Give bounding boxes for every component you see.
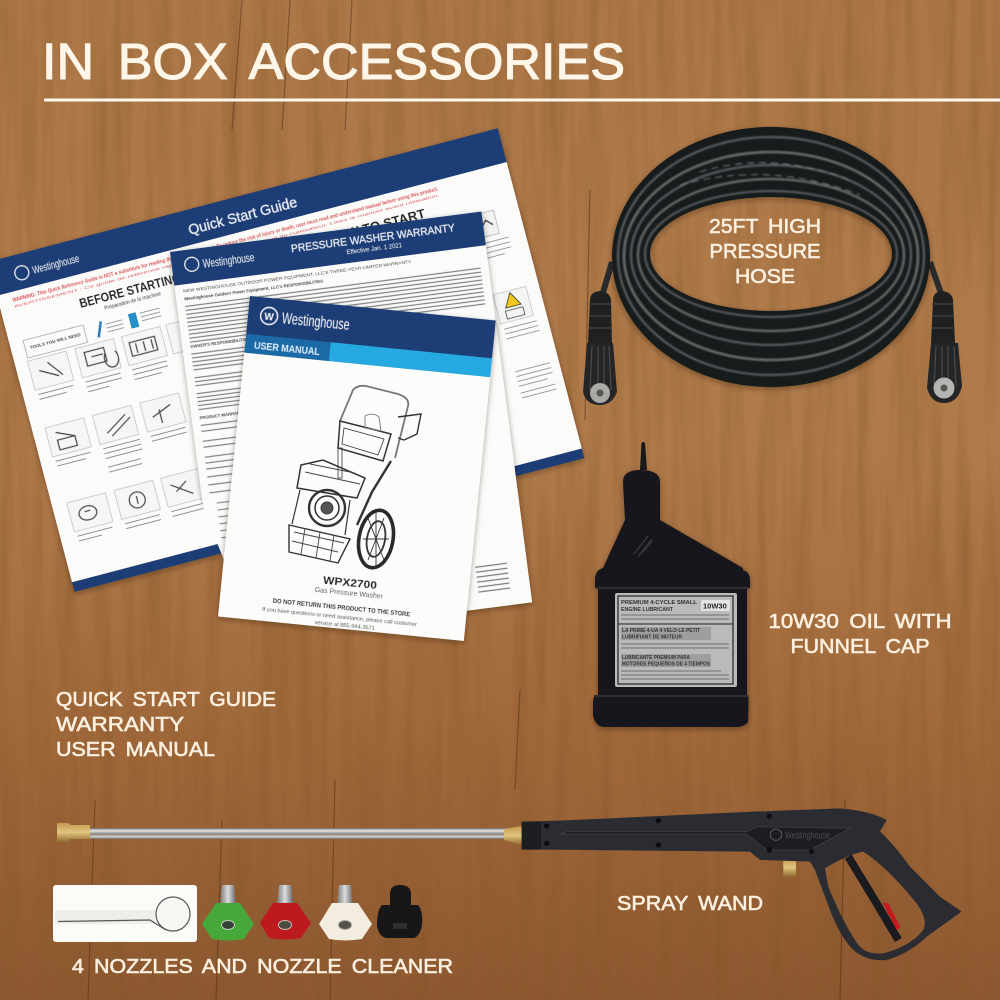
hose left lead and fitting (583, 262, 617, 405)
warranty header band: Westinghouse (202, 250, 255, 271)
panel: quick start guide sheet (0, 128, 584, 592)
hose label: HOSE (735, 265, 795, 288)
user manual header (244, 296, 496, 377)
oil bottle label: LA PRIME 4-UA 4 VELO LE PETIT (622, 628, 700, 634)
user manual model text: WPX2700 (322, 575, 377, 592)
tools you will need box: TOOLS YOU WILL NEED (29, 332, 82, 350)
warranty body text: NEW WESTINGHOUSE OUTDOOR POWER EQUIPMENT, LLC'S THREE-YEAR LIMITED WARRANTY (183, 259, 412, 294)
user manual model text: service at 855-944-3571 (314, 620, 375, 632)
nozzles label: 4 NOZZLES AND NOZZLE CLEANER (72, 955, 453, 978)
oil bottle label: 10W30 (703, 602, 727, 610)
icon: spray wand (57, 808, 962, 960)
icon: green nozzle (202, 885, 254, 940)
quick start header band: Westinghouse (31, 253, 81, 277)
warranty header band (170, 212, 486, 286)
user manual model text: If you have questions or need assistance, please call customer (262, 607, 417, 628)
warranty header band: Effective Jan. 1 2021 (346, 243, 403, 256)
wand brass tip (57, 823, 90, 842)
icon: black nozzle (377, 885, 422, 938)
oil label: 10W30 OIL WITH (768, 610, 952, 633)
quick start section headings: BEFORE STARTING (78, 271, 182, 311)
oil bottle label: PREMIUM 4-CYCLE SMALL (621, 600, 698, 606)
hose right lead and fitting (927, 262, 962, 403)
spray wand label: SPRAY WAND (617, 892, 763, 915)
documents label: USER MANUAL (56, 738, 215, 761)
nozzle cleaner card (53, 885, 197, 942)
warranty body text: Westinghouse Outdoor Power Equipment, LLC's RESPONSIBILITIES (184, 278, 324, 303)
oil bottle label (615, 593, 737, 687)
user manual header: Westinghouse (281, 310, 350, 334)
title: IN BOX ACCESSORIES (42, 33, 625, 90)
quick start warning: WARNING: This Quick Reference Guide is NOT a substitute for reading the Operator's Manual. To reduce the risk of injury or death, user must read and understand manual before using this product. (12, 186, 440, 304)
wand collar (504, 826, 522, 845)
quick start right side illustrations (470, 206, 557, 399)
quick start footer band (72, 448, 584, 592)
quick start instruction illustrations (27, 317, 242, 542)
hose coil (612, 127, 930, 387)
documents label (56, 688, 276, 761)
spray gun (522, 808, 962, 960)
user manual model text: Gas Pressure Washer (314, 587, 384, 601)
icon: oil bottle (593, 442, 750, 727)
warranty body text: PRODUCT WARRANTY (199, 410, 246, 421)
panel: warranty sheet (170, 212, 532, 643)
wand rod (88, 828, 508, 839)
user manual header: USER MANUAL (253, 340, 321, 358)
hose label: PRESSURE (710, 240, 820, 263)
panel: user manual (218, 296, 496, 641)
quick start header band: Quick Start Guide (186, 194, 299, 239)
oil bottle label: MOTORES PEQUEÑOS DE 4 TIEMPOS (622, 660, 711, 668)
oil bottle label: LUBRICANTE PREMIUM PARA (622, 655, 690, 661)
warranty header band: PRESSURE WASHER WARRANTY (290, 222, 456, 255)
quick start section headings: Préparation de la machine (104, 291, 162, 312)
icon: coiled hose (583, 127, 962, 405)
quick start warning: AVERTISSEMENT : Ce guide de référence rapide ne remplace pas le manuel de l'utilisateur. Lisez le manuel avant utilisation. (14, 193, 440, 309)
hose label (709, 215, 821, 288)
oil bottle label: LUBRIFIANT DE MOTEUR (622, 634, 682, 640)
icon: red nozzle (260, 885, 311, 940)
icon: white nozzle (319, 885, 372, 940)
documents label: QUICK START GUIDE (56, 688, 276, 711)
quick start section headings: HOW TO START (326, 207, 427, 246)
spray gun: Westinghouse (785, 831, 830, 842)
hose label: 25FT HIGH (709, 215, 821, 238)
quick start section headings (78, 207, 429, 318)
oil bottle label: ENGINE LUBRICANT (621, 607, 674, 613)
documents label: WARRANTY (56, 713, 184, 736)
user manual model text: DO NOT RETURN THIS PRODUCT TO THE STORE (272, 598, 411, 619)
oil label: FUNNEL CAP (790, 635, 930, 658)
oil label (768, 610, 952, 658)
warranty body text (183, 260, 510, 593)
user manual header: W (264, 312, 275, 323)
quick start header band (0, 128, 507, 296)
title rule (44, 98, 1000, 102)
pressure washer line drawing (289, 386, 421, 571)
warranty body text: OWNER'S RESPONSIBILITIES (190, 336, 250, 349)
tools you will need box (23, 305, 163, 358)
user manual model text (261, 569, 421, 636)
